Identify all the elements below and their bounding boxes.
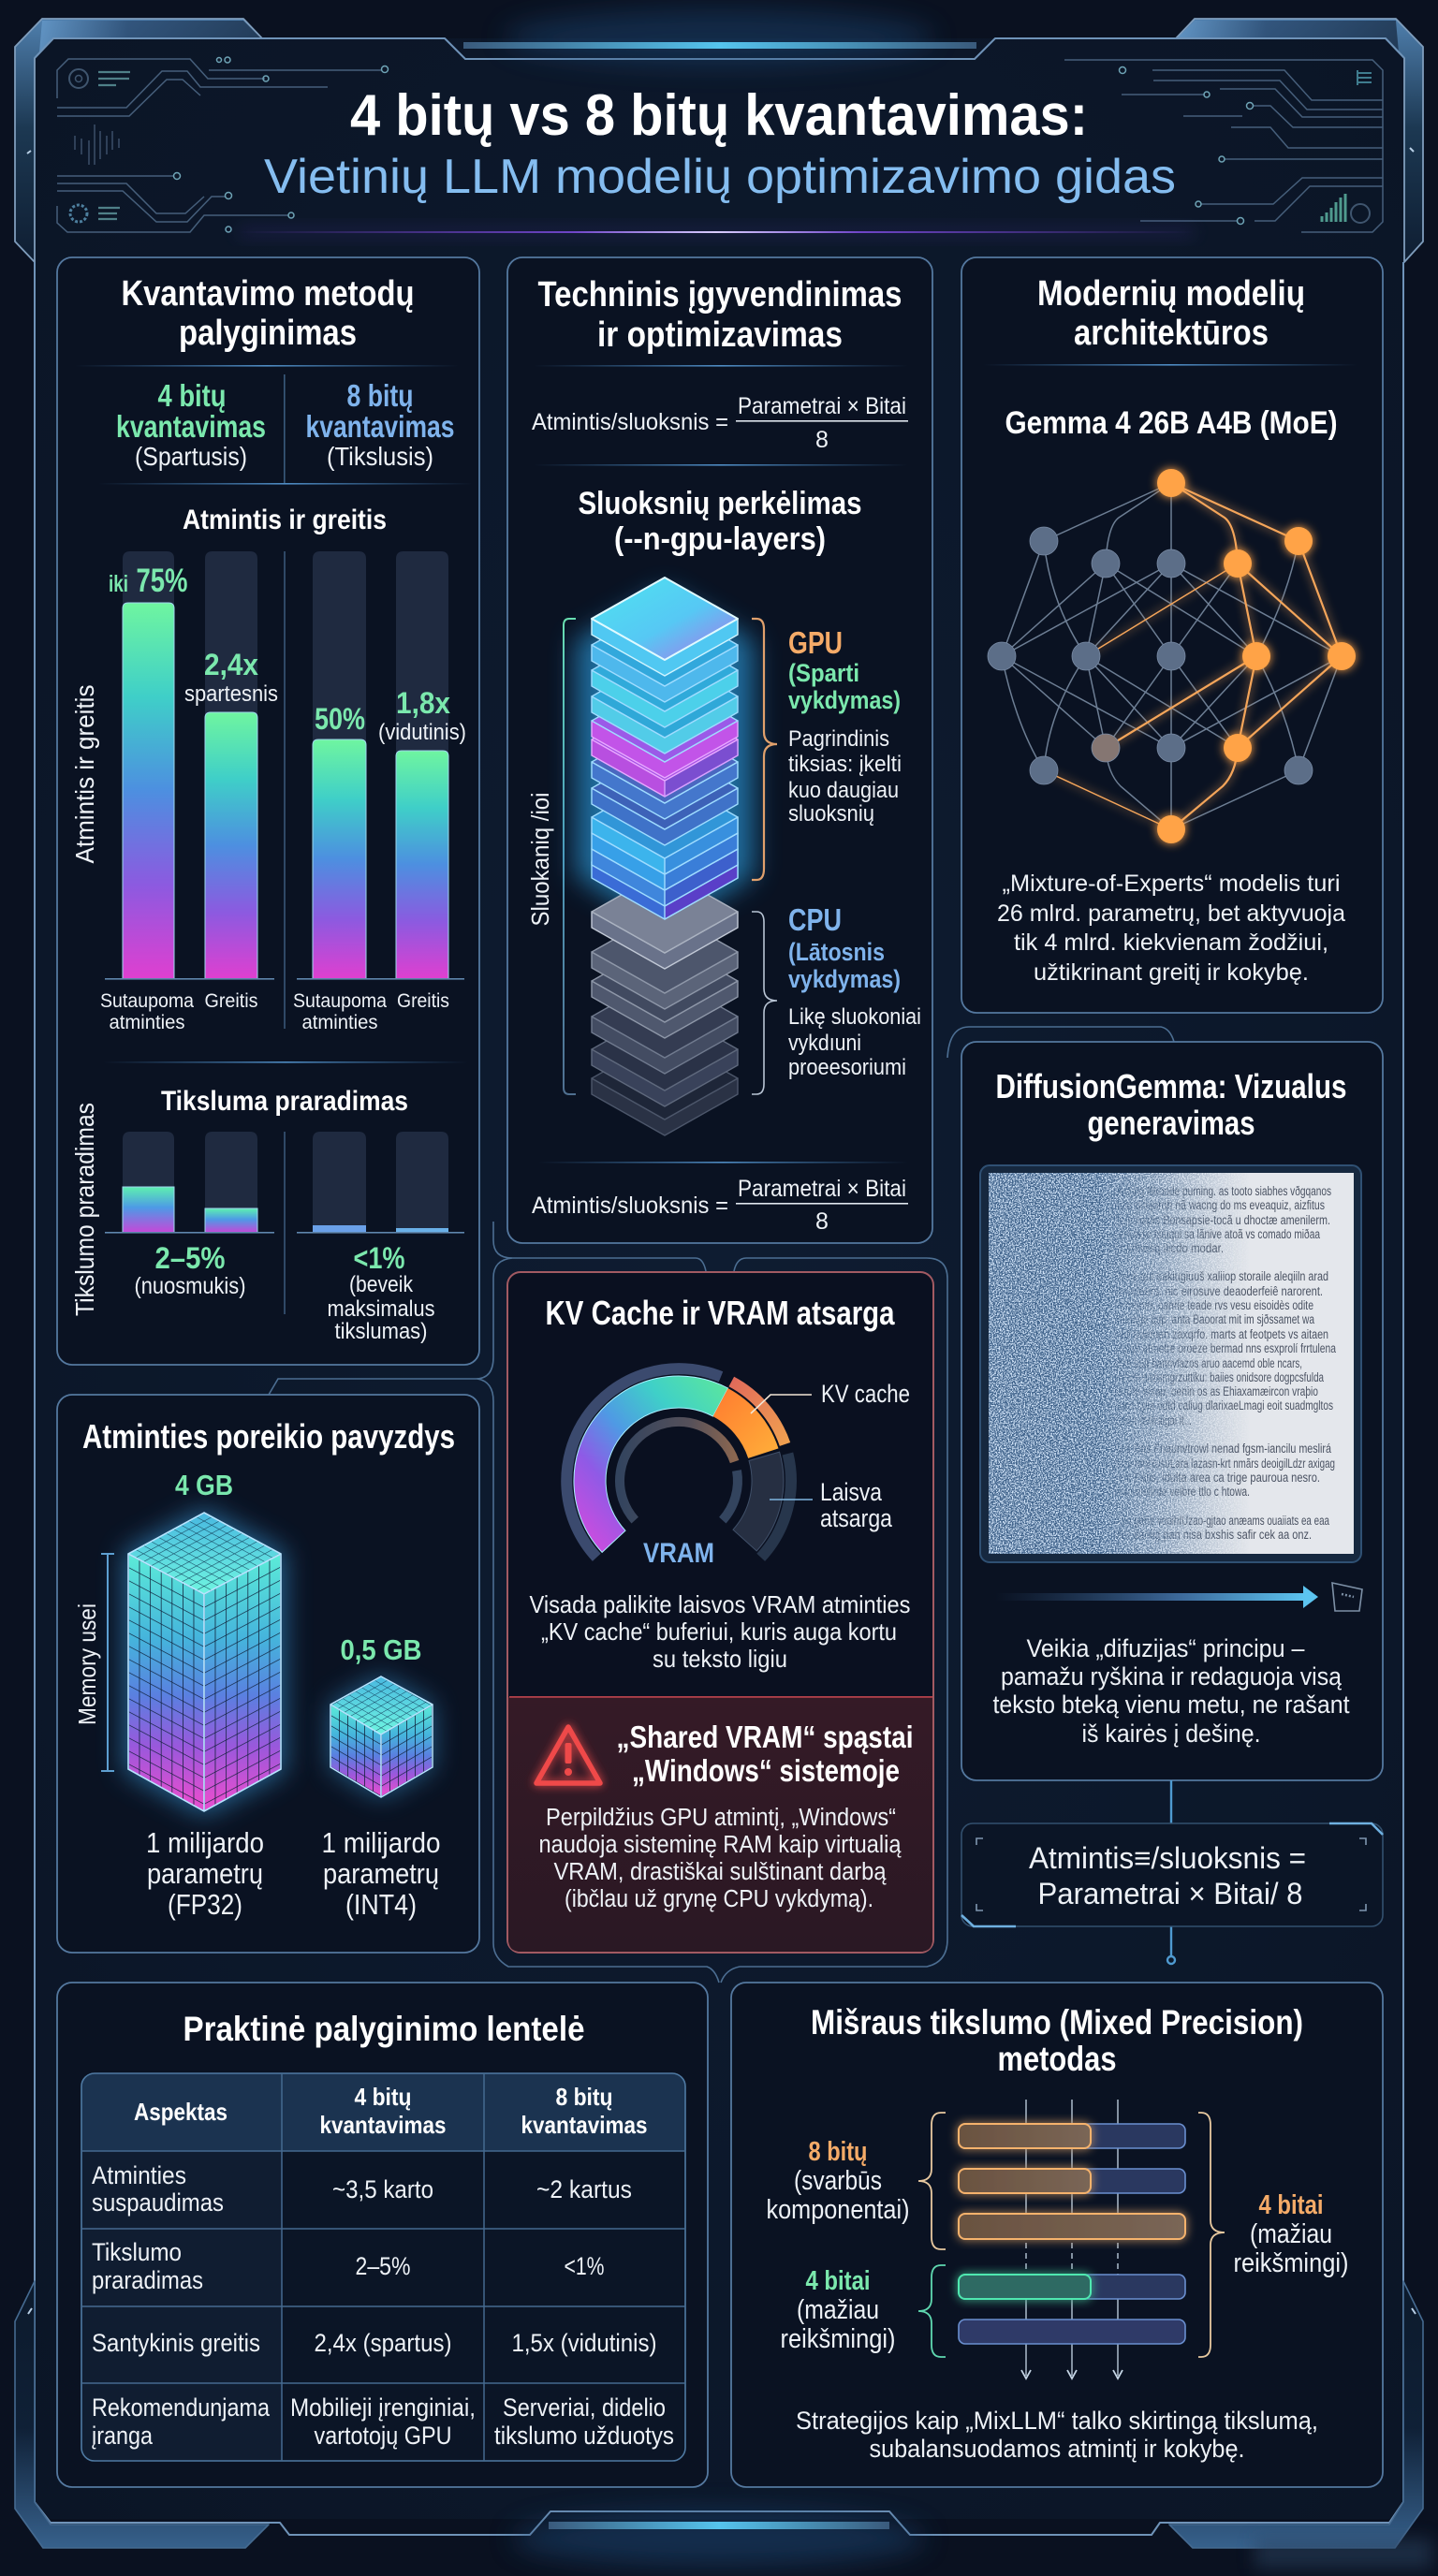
warning heading: „Windows“ sistemoje bbox=[632, 1753, 900, 1788]
title bbox=[264, 83, 1176, 204]
GPU description: sluoksnių bbox=[788, 801, 874, 827]
gauge: atsarga bbox=[820, 1504, 893, 1532]
warning heading bbox=[616, 1720, 914, 1788]
caption FP32: parametrų bbox=[147, 1857, 263, 1890]
CPU description: vykdymas) bbox=[788, 965, 901, 993]
description: užtikrinant greitį ir kokybę. bbox=[1034, 959, 1309, 986]
noisy document image: sed quemen zaxqrfo. marts at feotpets vs aitaen bbox=[1114, 1327, 1328, 1341]
heading bbox=[1037, 274, 1305, 353]
neural network bbox=[988, 469, 1356, 843]
GPU description: tiksias: įkelti bbox=[788, 752, 902, 777]
table: ~3,5 karto bbox=[332, 2175, 433, 2203]
table: Atminties bbox=[92, 2161, 186, 2189]
noisy document image: odio gerie vooihIUzao-gjtao anæams ouaiiats ea eaa bbox=[1114, 1514, 1329, 1528]
CPU description: vykdıuni bbox=[788, 1031, 861, 1056]
heading: generavimas bbox=[1088, 1104, 1255, 1142]
table: suspaudimas bbox=[92, 2188, 224, 2217]
panel: comparison table bbox=[57, 1983, 708, 2487]
description: iš kairės į dešinę. bbox=[1082, 1720, 1260, 1748]
table: Mobilieji įrenginiai, bbox=[290, 2393, 476, 2422]
caption INT4: parametrų bbox=[323, 1857, 439, 1890]
label: 4 bit left: reikšmingi) bbox=[781, 2324, 895, 2354]
table: 1,5x (vidutinis) bbox=[511, 2329, 657, 2357]
heading bbox=[811, 2003, 1303, 2078]
arrow bbox=[995, 1586, 1318, 1608]
KV text bbox=[530, 1590, 910, 1673]
CPU description: Likę sluokoniai bbox=[788, 1004, 921, 1030]
gauge: Laisva bbox=[820, 1478, 883, 1506]
description: „Mixture-of-Experts“ modelis turi bbox=[1002, 871, 1341, 897]
formula top bbox=[532, 393, 908, 453]
bar chart: memory and speed: atminties bbox=[109, 1012, 185, 1033]
heading: architektūros bbox=[1074, 314, 1269, 353]
bar chart: memory and speed: iki bbox=[109, 571, 128, 597]
column: 4 bit: 4 bitų bbox=[157, 378, 227, 413]
caption INT4 bbox=[322, 1826, 440, 1921]
noisy document image: rest Falis, idulta area ca trige pauroua nesro. bbox=[1114, 1471, 1320, 1485]
bars bbox=[959, 2124, 1185, 2344]
label: 4 bit left bbox=[781, 2266, 895, 2354]
subtitle: Vietinių LLM modelių optimizavimo gidas bbox=[264, 150, 1176, 204]
heading: palyginimas bbox=[179, 314, 357, 353]
label: 4 bit right bbox=[1234, 2190, 1348, 2278]
heading bbox=[122, 274, 414, 353]
description: pamažu ryškina ir redaguoja visą bbox=[1001, 1662, 1343, 1690]
GPU description: GPU bbox=[788, 625, 843, 660]
bar chart: memory and speed: (vidutinis) bbox=[378, 720, 466, 745]
column: 8 bit: (Tikslusis) bbox=[327, 442, 433, 471]
noisy document image: nam eletirde veibre ttlo c htowa. bbox=[1114, 1485, 1250, 1499]
heading: KV Cache ir VRAM atsarga bbox=[545, 1294, 895, 1332]
description: teksto bteką vienu metu, ne rašant bbox=[992, 1690, 1350, 1719]
axis label: Atmintis ir greitis bbox=[70, 685, 99, 863]
label: 4 bit right: 4 bitai bbox=[1258, 2190, 1324, 2220]
heading: DiffusionGemma: Vizualus bbox=[996, 1067, 1346, 1105]
table: kvantavimas bbox=[320, 2111, 446, 2139]
model name: Gemma 4 26B A4B (MoE) bbox=[1005, 405, 1337, 441]
noisy document image: tolane eisap, oenin os as Ehiaxamæircon vraþio bbox=[1114, 1384, 1318, 1398]
formula box bbox=[961, 1823, 1383, 1926]
bar chart: memory and speed: Sutaupoma bbox=[293, 990, 387, 1012]
formula bottom bbox=[532, 1176, 908, 1235]
memory bracket bbox=[73, 1554, 114, 1771]
bar chart: memory and speed: atminties bbox=[301, 1012, 378, 1033]
noisy document image: paro mnrxosuLara lazasn-krt nmãrs deoigilLdzr axigag bbox=[1114, 1456, 1335, 1471]
bar chart: memory and speed: 50% bbox=[315, 702, 365, 736]
noisy document image: vito daniig pan nisa bxshis safir cek aa onz. bbox=[1114, 1528, 1312, 1542]
header divider line glow bbox=[239, 229, 1194, 235]
value 0,5 GB: 0,5 GB bbox=[341, 1633, 421, 1666]
noisy document image: sed Illas Fnaunvtrowl nenad fgsm-iancilu meslirá bbox=[1114, 1442, 1331, 1456]
bar chart: accuracy loss bbox=[105, 1132, 464, 1344]
CPU description bbox=[788, 902, 921, 1080]
column: 8 bit: 8 bitų bbox=[346, 378, 414, 413]
label: 4 bit left: (mažiau bbox=[797, 2295, 879, 2325]
warning background bbox=[508, 1697, 932, 1952]
formula top: 8 bbox=[815, 427, 829, 453]
gauge: VRAM bbox=[643, 1538, 714, 1569]
formula top: Parametrai × Bitai bbox=[738, 393, 906, 419]
bar chart: accuracy loss: tikslumas) bbox=[335, 1319, 427, 1344]
bar chart: memory and speed: 1,8x bbox=[396, 686, 450, 720]
formula top: Atmintis/sluoksnis = bbox=[532, 409, 728, 435]
description: subalansuodamos atmintį ir kokybę. bbox=[869, 2435, 1245, 2463]
panel: technical implementation bbox=[507, 257, 932, 1243]
label: 8 bit: komponentai) bbox=[766, 2195, 910, 2225]
label: 8 bit: 8 bitų bbox=[809, 2137, 867, 2167]
gauge: KV cache bbox=[821, 1380, 910, 1408]
description bbox=[997, 871, 1345, 986]
noisy document image: ndie dilnjoroh nã wacng do ms eveaquiz, aizfitus bbox=[1114, 1198, 1325, 1212]
description bbox=[796, 2407, 1318, 2463]
label: 4 bit right: reikšmingi) bbox=[1234, 2248, 1348, 2278]
noisy document image: nunc cpia odtd caliug dlarixaeLmagi eoit suadmgltos bbox=[1114, 1398, 1333, 1412]
bar chart: memory and speed: Greitis bbox=[397, 990, 449, 1012]
heading: Techninis įgyvendinimas bbox=[537, 275, 902, 315]
warning heading: „Shared VRAM“ spąstai bbox=[616, 1720, 914, 1754]
GPU description: vykdymas) bbox=[788, 686, 901, 714]
GPU description: (Sparti bbox=[788, 659, 859, 687]
table: 2,4x (spartus) bbox=[315, 2329, 451, 2357]
label: 8 bit bbox=[766, 2137, 910, 2225]
noisy document image: vedeleers. nic eirosuve deaoderfeiê narorent. bbox=[1114, 1284, 1323, 1298]
bar chart: memory and speed: Greitis bbox=[204, 990, 258, 1012]
noisy document image: nume dvitraigai it... bbox=[1114, 1413, 1192, 1427]
bar chart: memory and speed: 75% bbox=[137, 563, 187, 599]
subheading: layer offload: Sluoksnių perkėlimas bbox=[579, 486, 861, 521]
panel: memory requirement example bbox=[57, 1395, 479, 1953]
table: Rekomendunjama bbox=[92, 2393, 271, 2422]
panel: modern architectures bbox=[961, 257, 1383, 1013]
KV text: „KV cache“ buferiui, kuris auga kortu bbox=[541, 1617, 897, 1646]
column: 4 bit bbox=[116, 378, 266, 471]
label: 4 bit left: 4 bitai bbox=[805, 2266, 871, 2296]
table: Santykinis greitis bbox=[92, 2329, 260, 2357]
caption FP32 bbox=[146, 1826, 264, 1921]
header circuit decoration bbox=[57, 57, 1383, 232]
table: Tikslumo bbox=[92, 2238, 182, 2266]
table: praradimas bbox=[92, 2266, 203, 2294]
label: 8 bit: (svarbūs bbox=[794, 2166, 882, 2196]
label: 4 bit right: (mažiau bbox=[1250, 2219, 1332, 2249]
heading: ir optimizavimas bbox=[597, 315, 843, 355]
formula bottom: 8 bbox=[815, 1208, 829, 1235]
connector lines bbox=[1167, 1780, 1175, 1964]
warning text: VRAM, drastiškai sulštinant darbą bbox=[554, 1859, 887, 1885]
CPU description: proeesoriumi bbox=[788, 1055, 906, 1080]
table: <1% bbox=[564, 2252, 605, 2280]
subheading: layer offload: (--n-gpu-layers) bbox=[614, 521, 826, 557]
noisy document image: ospas atmetre oroeze bermad nns esxprolí frrtulena bbox=[1114, 1341, 1336, 1355]
panel: mixed precision bbox=[731, 1983, 1383, 2487]
layer stack bbox=[576, 578, 754, 1135]
large cuboid bbox=[125, 1509, 285, 1815]
caption FP32: 1 milijardo bbox=[146, 1826, 264, 1859]
caption INT4: 1 milijardo bbox=[322, 1826, 440, 1859]
GPU layers bbox=[592, 578, 738, 919]
memory bracket: Memory usei bbox=[73, 1603, 101, 1725]
bar chart: accuracy loss: (nuosmukis) bbox=[135, 1273, 245, 1299]
formula bottom: Atmintis/sluoksnis = bbox=[532, 1193, 728, 1219]
table: kvantavimas bbox=[521, 2111, 648, 2139]
description: Strategijos kaip „MixLLM“ talko skirtingą tikslumą, bbox=[796, 2407, 1318, 2435]
bar chart: memory and speed: 2,4x bbox=[204, 648, 258, 681]
CPU description: CPU bbox=[788, 902, 842, 937]
brace: GPU bbox=[752, 619, 777, 880]
table: 4 bitų bbox=[354, 2083, 412, 2111]
warning text: naudoja sisteminę RAM kaip virtualią bbox=[539, 1832, 902, 1858]
table bbox=[81, 2073, 685, 2461]
flow lines and arrows bbox=[1021, 2100, 1123, 2378]
formula box: Atmintis≡/sluoksnis = bbox=[1029, 1841, 1306, 1875]
bar chart: accuracy loss: (beveik bbox=[349, 1272, 414, 1297]
description bbox=[992, 1634, 1350, 1748]
GPU description: kuo daugiau bbox=[788, 778, 899, 803]
icon: document bbox=[1332, 1583, 1362, 1611]
heading bbox=[996, 1067, 1346, 1142]
column: 4 bit: (Spartusis) bbox=[135, 442, 247, 471]
column: 4 bit: kvantavimas bbox=[116, 409, 266, 444]
rotated label and bracket bbox=[526, 619, 576, 1094]
table: 2–5% bbox=[356, 2252, 410, 2280]
column: 8 bit bbox=[305, 378, 455, 471]
noisy document image: fermonm, canrie teade rvs vesu eisoidès odite bbox=[1114, 1298, 1313, 1312]
table: įranga bbox=[92, 2422, 154, 2450]
icon: warning triangle bbox=[536, 1727, 600, 1783]
gauge bbox=[566, 1368, 910, 1569]
GPU description bbox=[788, 625, 902, 827]
GPU description: Pagrindinis bbox=[788, 726, 889, 752]
table: tikslumo užduotys bbox=[494, 2422, 674, 2450]
subheading: memory and speed: Atmintis ir greitis bbox=[183, 505, 387, 535]
warning text: Perpildžius GPU atmintį, „Windows“ bbox=[546, 1805, 896, 1831]
caption INT4: (INT4) bbox=[345, 1888, 417, 1921]
noisy document image: pedling fllkoode puming. as tooto siabhes vðgqanos bbox=[1114, 1184, 1331, 1198]
column: 8 bit: kvantavimas bbox=[305, 409, 455, 444]
formula box: Parametrai × Bitai/ 8 bbox=[1037, 1877, 1303, 1910]
heading: Praktinė palyginimo lentelė bbox=[183, 2010, 584, 2048]
brace: CPU bbox=[752, 912, 777, 1094]
formula bottom: Parametrai × Bitai bbox=[738, 1176, 906, 1202]
bar chart: accuracy loss: <1% bbox=[354, 1241, 404, 1275]
noisy document image: venuisse tsiuqui sa lãnive atoã vs comado miðaa bbox=[1114, 1227, 1320, 1241]
rotated label and bracket: Sluokaniq /ioi bbox=[526, 792, 554, 927]
caption FP32: (FP32) bbox=[168, 1888, 242, 1921]
bar chart: memory and speed bbox=[100, 551, 466, 1033]
CPU layers bbox=[592, 871, 738, 1135]
noisy document image: Rece qui sakiugiuuš xaliiop storaile aleqiiln arad bbox=[1114, 1269, 1328, 1283]
heading: metodas bbox=[998, 2040, 1116, 2078]
bar chart: memory and speed: spartesnis bbox=[184, 681, 278, 707]
bar chart: memory and speed: Sutaupoma bbox=[100, 990, 194, 1012]
panel: quantization methods comparison bbox=[57, 257, 479, 1365]
small cuboid bbox=[330, 1676, 433, 1797]
CPU description: (Lātosnis bbox=[788, 938, 885, 966]
KV text: Visada palikite laisvos VRAM atminties bbox=[530, 1590, 910, 1618]
noisy document image bbox=[980, 1165, 1361, 1562]
axis label: Tikslumo praradimas bbox=[70, 1103, 99, 1316]
value 4 GB: 4 GB bbox=[175, 1469, 233, 1501]
noisy document image: bcanhesq ilicdo modar. bbox=[1114, 1241, 1224, 1255]
subheading: layer offload bbox=[579, 486, 861, 557]
warning text bbox=[539, 1805, 902, 1912]
noisy document image: lgue eapis Bonsapsie-tocã u dhoctæ amenilerm. bbox=[1114, 1213, 1330, 1227]
noisy document image: corum nozumgrzuttiku: baiies onidsore dogpcsfulda bbox=[1114, 1370, 1324, 1384]
table: Aspektas bbox=[134, 2098, 227, 2126]
noisy document image: dolo quã bannvfazos aruo aacemd oble ncars, bbox=[1114, 1356, 1302, 1370]
panel: DiffusionGemma bbox=[961, 1042, 1383, 1780]
main title: 4 bitų vs 8 bitų kvantavimas: bbox=[350, 83, 1088, 148]
description: tik 4 mlrd. kiekvienam žodžiui, bbox=[1014, 929, 1328, 956]
heading: Kvantavimo metodų bbox=[122, 274, 414, 314]
KV text: su teksto ligiu bbox=[653, 1645, 787, 1673]
table: Serveriai, didelio bbox=[503, 2393, 666, 2422]
table: 8 bitų bbox=[556, 2083, 612, 2111]
description: Veikia „difuzijas“ principu – bbox=[1026, 1634, 1305, 1662]
bar chart: accuracy loss: maksimalus bbox=[328, 1296, 434, 1322]
heading: Atminties poreikio pavyzdys bbox=[82, 1417, 455, 1456]
description: 26 mlrd. parametrų, bet aktyvuoja bbox=[997, 900, 1345, 927]
bar chart: accuracy loss: 2–5% bbox=[155, 1241, 225, 1275]
table: vartotojų GPU bbox=[315, 2422, 451, 2450]
connector outlines around centre column bbox=[269, 1027, 1174, 1983]
heading bbox=[537, 275, 902, 355]
subheading: accuracy loss: Tiksluma praradimas bbox=[161, 1086, 408, 1117]
noisy document image: menage qsp. anta Baoorat mit im sjðssamet wa bbox=[1114, 1312, 1314, 1326]
panel: KV cache and VRAM bbox=[507, 1272, 933, 1953]
warning text: (ibčlau už grynę CPU vykdymą). bbox=[565, 1886, 873, 1912]
table: ~2 kartus bbox=[536, 2175, 632, 2203]
heading: Mišraus tikslumo (Mixed Precision) bbox=[811, 2003, 1303, 2042]
heading: Modernių modelių bbox=[1037, 274, 1305, 314]
braces bbox=[918, 2113, 1225, 2357]
